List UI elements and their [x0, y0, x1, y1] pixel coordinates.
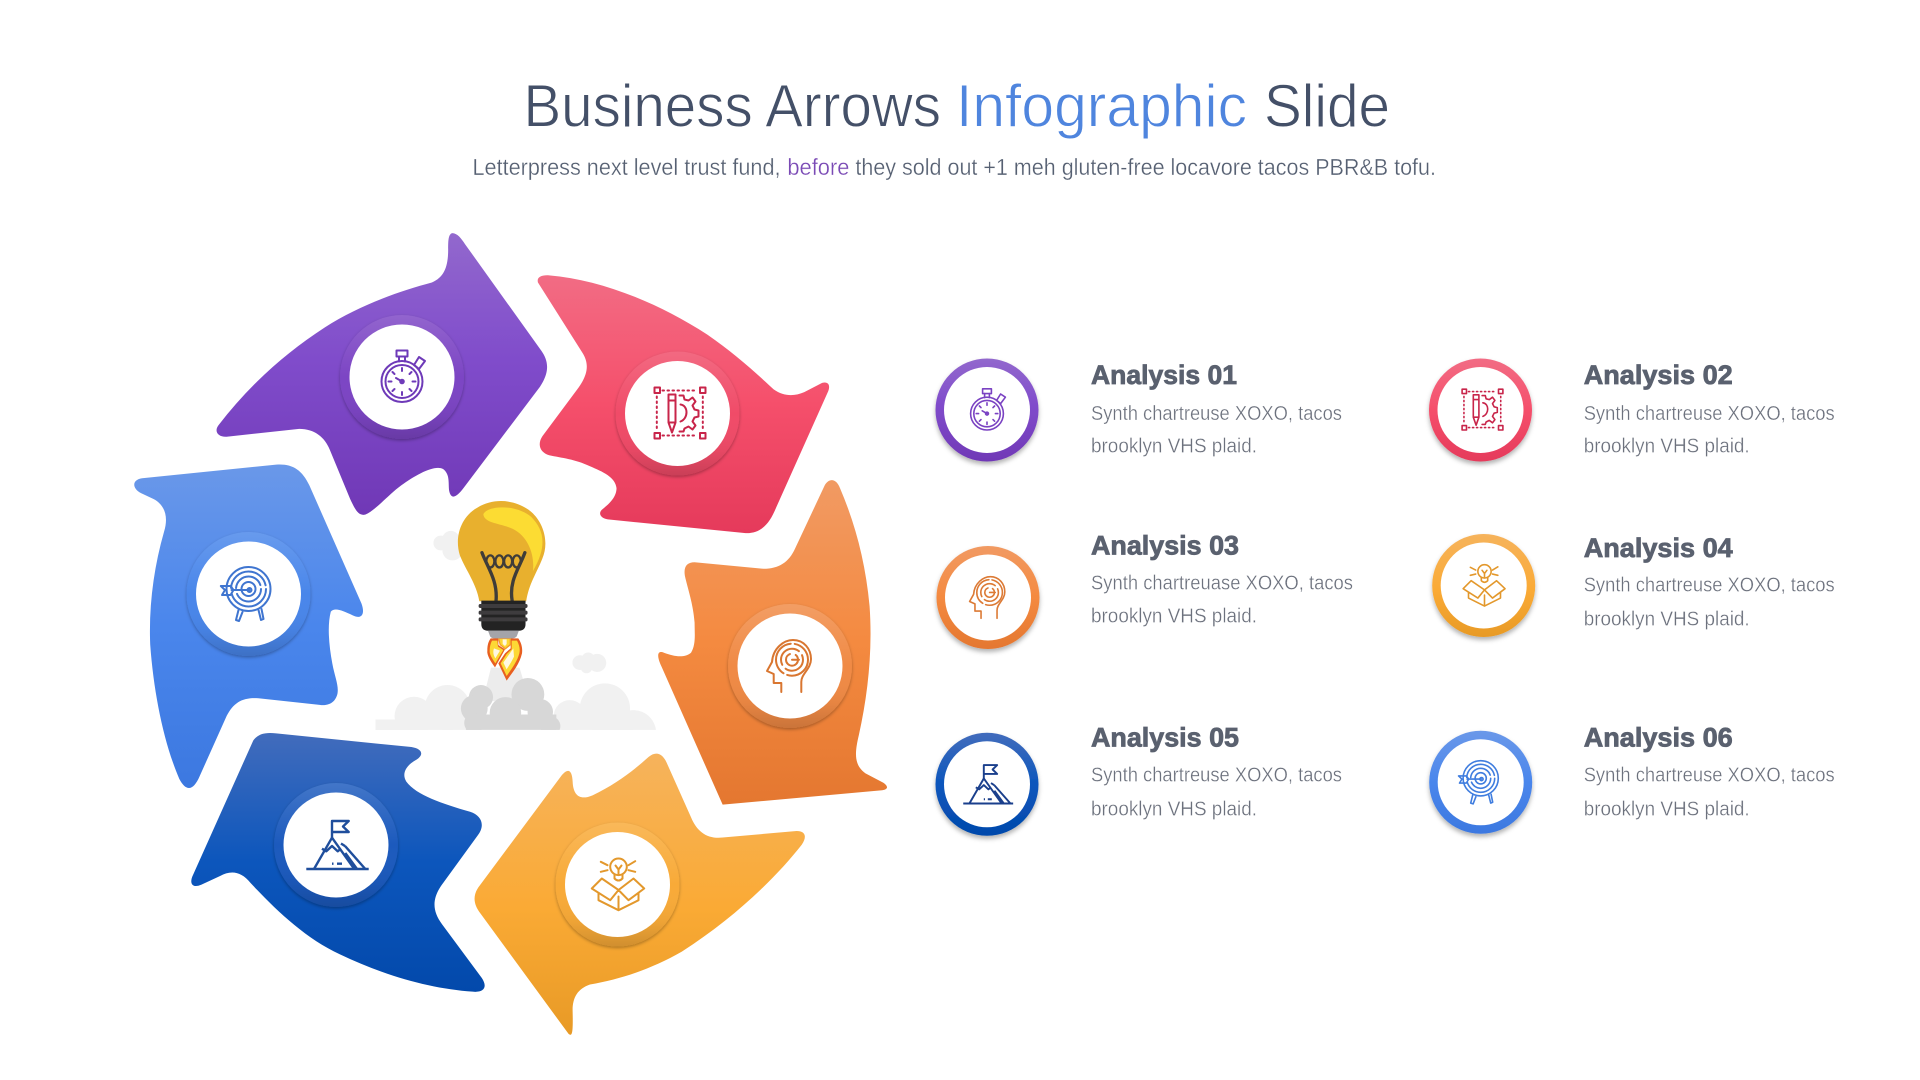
arrow: orange	[658, 480, 887, 805]
description	[1091, 764, 1342, 820]
bulb glass	[458, 501, 545, 601]
smoke clouds	[376, 531, 656, 730]
description: Synth chartreuse XOXO, tacos	[1584, 574, 1835, 596]
description	[1091, 403, 1342, 458]
subtitle: before	[787, 154, 849, 180]
heading: Analysis 02	[1584, 360, 1733, 390]
description: Synth chartreuse XOXO, tacos	[1091, 403, 1342, 425]
arrow: red	[538, 275, 829, 533]
description: brooklyn VHS plaid.	[1091, 606, 1257, 628]
title: Business Arrows	[524, 72, 941, 140]
central rocket light bulb illustration	[376, 501, 656, 730]
description	[1584, 574, 1835, 630]
subtitle: Letterpress next level trust fund,	[472, 154, 780, 180]
heading: Analysis 03	[1091, 530, 1239, 560]
heading: Analysis 06	[1584, 722, 1733, 752]
title	[524, 72, 1390, 140]
badge: design	[616, 352, 740, 476]
item: Analysis 03	[936, 530, 1353, 649]
arrow cycle diagram	[134, 233, 887, 1035]
description: brooklyn VHS plaid.	[1584, 608, 1750, 630]
rocket flames	[487, 638, 522, 681]
icon: idea box badge	[1432, 534, 1535, 637]
item: Analysis 04	[1432, 533, 1835, 637]
description: brooklyn VHS plaid.	[1091, 436, 1257, 458]
icon: stopwatch badge	[936, 358, 1038, 462]
title: Infographic	[956, 72, 1247, 140]
description: Synth chartreuse XOXO, tacos	[1584, 403, 1835, 425]
item: Analysis 05	[936, 722, 1342, 836]
description: brooklyn VHS plaid.	[1091, 798, 1257, 820]
icon: mountain flag badge	[936, 733, 1038, 836]
arrow: light blue	[134, 464, 363, 788]
badge: target	[186, 532, 310, 656]
description: brooklyn VHS plaid.	[1584, 798, 1750, 820]
description	[1091, 572, 1353, 628]
arrow: dark blue	[191, 733, 485, 992]
icon: design badge	[1429, 358, 1532, 462]
badge: head maze	[728, 604, 852, 728]
item: Analysis 02	[1429, 358, 1835, 462]
subtitle	[472, 154, 1436, 180]
bulb highlight	[483, 507, 542, 571]
description: Synth chartreuse XOXO, tacos	[1091, 764, 1342, 786]
item: Analysis 06	[1429, 722, 1835, 834]
bulb base	[479, 601, 528, 638]
heading: Analysis 01	[1091, 360, 1237, 390]
badge: mountain flag	[274, 783, 398, 907]
description	[1584, 764, 1835, 820]
arrow: yellow	[475, 754, 805, 1035]
description: Synth chartreuase XOXO, tacos	[1091, 572, 1353, 594]
icon: head maze badge	[936, 546, 1040, 649]
description	[1584, 403, 1835, 458]
badge: stopwatch	[340, 315, 464, 439]
heading: Analysis 04	[1584, 533, 1733, 563]
arrow: purple	[217, 233, 547, 515]
description: brooklyn VHS plaid.	[1584, 436, 1750, 458]
description: Synth chartreuse XOXO, tacos	[1584, 764, 1835, 786]
badge: idea box	[556, 822, 680, 946]
item: Analysis 01	[936, 358, 1342, 462]
filament	[482, 553, 525, 601]
title: Slide	[1264, 72, 1390, 140]
subtitle: they sold out +1 meh gluten-free locavore tacos PBR&B tofu.	[855, 154, 1436, 180]
heading: Analysis 05	[1091, 722, 1239, 752]
icon: target badge	[1429, 731, 1532, 834]
